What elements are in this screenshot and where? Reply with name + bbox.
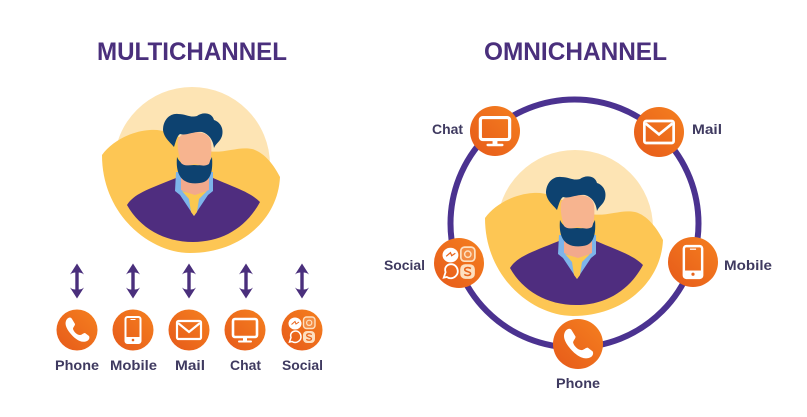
channel labels: Chat [432,121,463,137]
panel: omnichannel [384,38,772,391]
icon: social [434,238,484,288]
channel labels: Mail [175,357,205,373]
channel labels: Chat [230,357,261,373]
channel labels: Social [282,357,323,373]
icon: mobile [112,310,154,350]
channel labels: Mail [692,121,722,137]
channel labels: Mobile [110,357,157,373]
icon: mail [168,310,210,350]
icon: social [282,310,322,350]
illustration: customer [485,150,663,316]
channel labels: Mobile [724,257,772,273]
icon: phone [56,310,98,350]
heading: multichannel: MULTICHANNEL [97,38,287,66]
heading: omnichannel: OMNICHANNEL [484,38,667,66]
channel labels [384,121,772,391]
channel labels: Phone [55,357,99,373]
channel labels [55,357,323,373]
icon: chat [470,106,520,156]
icon: mobile [668,237,718,287]
icon: mail [634,107,684,157]
icon: phone [553,319,603,369]
ring connecting channels [450,100,698,348]
illustration: customer [102,87,280,253]
channel labels: Social [384,257,425,273]
icon: chat [224,310,266,350]
panel: multichannel [55,38,323,373]
channel labels: Phone [556,375,600,391]
arrows: customer to each channel [70,264,309,298]
